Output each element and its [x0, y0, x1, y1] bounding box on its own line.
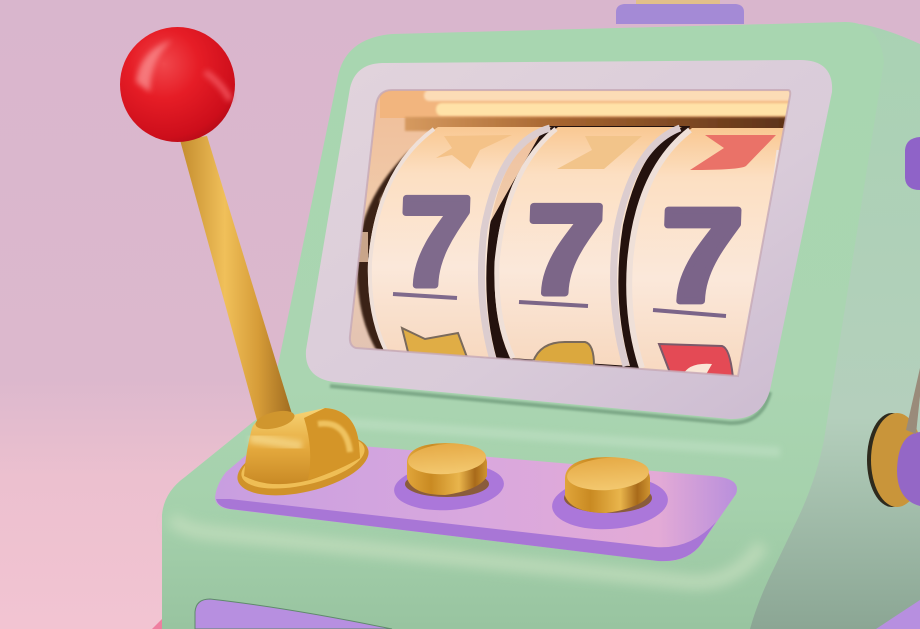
- digit 7: 7: [658, 181, 745, 329]
- lever rod: [180, 136, 296, 433]
- highlight along base edge: [172, 518, 762, 582]
- button 1: [393, 441, 505, 514]
- dark gaps between reels: [480, 126, 690, 372]
- window frame: [306, 60, 832, 419]
- light bars: [380, 91, 790, 118]
- lever ball: [120, 27, 235, 142]
- button 2: [550, 455, 670, 533]
- symbol: top red seven: [690, 135, 776, 170]
- digit 7: 7: [397, 171, 473, 312]
- machine side panel: [735, 24, 920, 629]
- reel 2: [495, 127, 682, 366]
- symbol: bottom red seven: [659, 344, 733, 378]
- machine body: [162, 22, 884, 629]
- top purple cap: [616, 0, 744, 24]
- reel 3: [627, 128, 786, 378]
- purple button plate: [215, 438, 737, 561]
- lever base: [232, 408, 374, 506]
- underline: [519, 302, 588, 306]
- window inner rim: [350, 90, 790, 376]
- soft light band behind plate: [300, 420, 780, 452]
- window interior: [340, 85, 800, 385]
- lower drawer: [152, 599, 920, 629]
- right side purple button: [905, 137, 920, 190]
- symbol: top seven: [557, 136, 642, 169]
- reel 1: [368, 127, 552, 360]
- digit 7: 7: [524, 180, 606, 321]
- underline: [653, 310, 726, 316]
- symbol: top star: [436, 135, 512, 169]
- symbol: bottom lemon: [533, 342, 594, 366]
- frame shadow: [330, 386, 770, 423]
- symbol: bottom star: [402, 328, 468, 360]
- underline: [393, 294, 457, 298]
- reel peg: [358, 232, 368, 262]
- dark crescent left of reels: [357, 150, 410, 356]
- right side coin knob: [867, 368, 920, 507]
- shadow band under lights: [405, 117, 795, 131]
